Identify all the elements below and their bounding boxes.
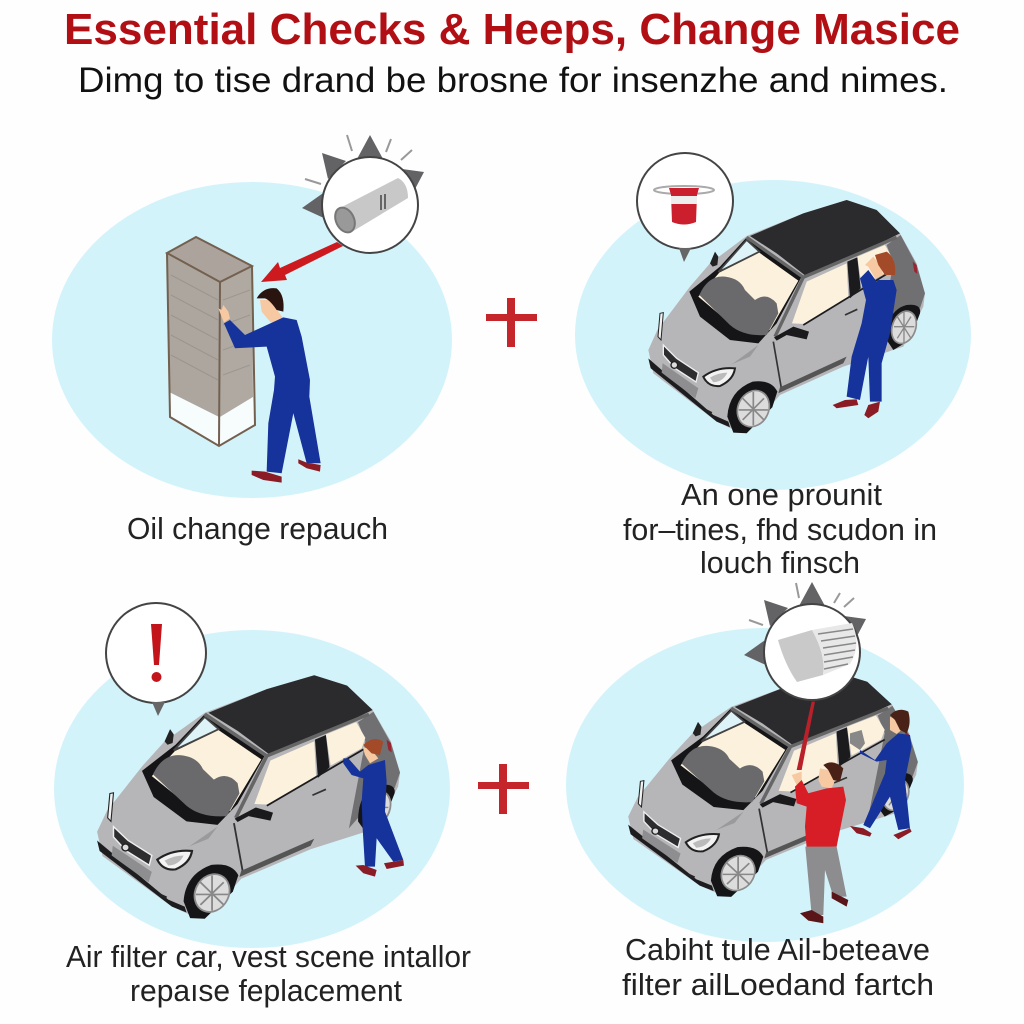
label: top right bbox=[623, 477, 937, 580]
label: top right: for–tines, fhd scudon in bbox=[623, 512, 937, 547]
panel: air filter bbox=[54, 603, 450, 948]
operator plus bottom bbox=[478, 764, 529, 814]
figure: mechanic bbox=[343, 739, 404, 877]
label: air filter: Air filter car, vest scene intallor bbox=[66, 939, 471, 974]
label: cabin filter: Cabiht tule Ail-beteave bbox=[625, 932, 930, 967]
callout: cabin filter bbox=[744, 582, 866, 700]
car bbox=[648, 200, 925, 433]
figure: red mechanic bbox=[792, 702, 848, 923]
figure: mechanic bbox=[218, 288, 321, 483]
panel background bbox=[566, 628, 964, 942]
car bbox=[628, 672, 918, 897]
callout: oil cup bbox=[637, 153, 733, 262]
label: air filter bbox=[66, 939, 471, 1008]
callout: oil filter bbox=[302, 135, 424, 253]
car bbox=[97, 675, 400, 919]
label: top right: An one prounit bbox=[681, 477, 882, 512]
title: Essential Checks & Heeps, Change Masice bbox=[64, 5, 960, 54]
figure: mechanic bbox=[833, 252, 897, 418]
subtitle: Dimg to tise drand be brosne for insenzhe and nimes. bbox=[78, 61, 948, 100]
label: cabin filter bbox=[622, 932, 934, 1002]
icon: filter box bbox=[167, 237, 255, 446]
figure: blue mechanic bbox=[850, 710, 912, 839]
arrow bbox=[261, 242, 343, 282]
label: oil change: Oil change repauch bbox=[127, 511, 388, 546]
panel background bbox=[575, 180, 971, 490]
label: cabin filter: filter ailLoedand fartch bbox=[622, 967, 934, 1002]
panel: oil change bbox=[52, 135, 452, 498]
label: air filter: repaıse feplacement bbox=[130, 973, 402, 1008]
label: top right: louch finsch bbox=[700, 545, 860, 580]
panel: car check bbox=[575, 153, 971, 490]
panel background bbox=[54, 630, 450, 948]
panel background bbox=[52, 182, 452, 498]
operator plus top bbox=[486, 298, 537, 347]
panel: cabin filter bbox=[566, 582, 964, 942]
callout: alert bbox=[106, 603, 206, 716]
